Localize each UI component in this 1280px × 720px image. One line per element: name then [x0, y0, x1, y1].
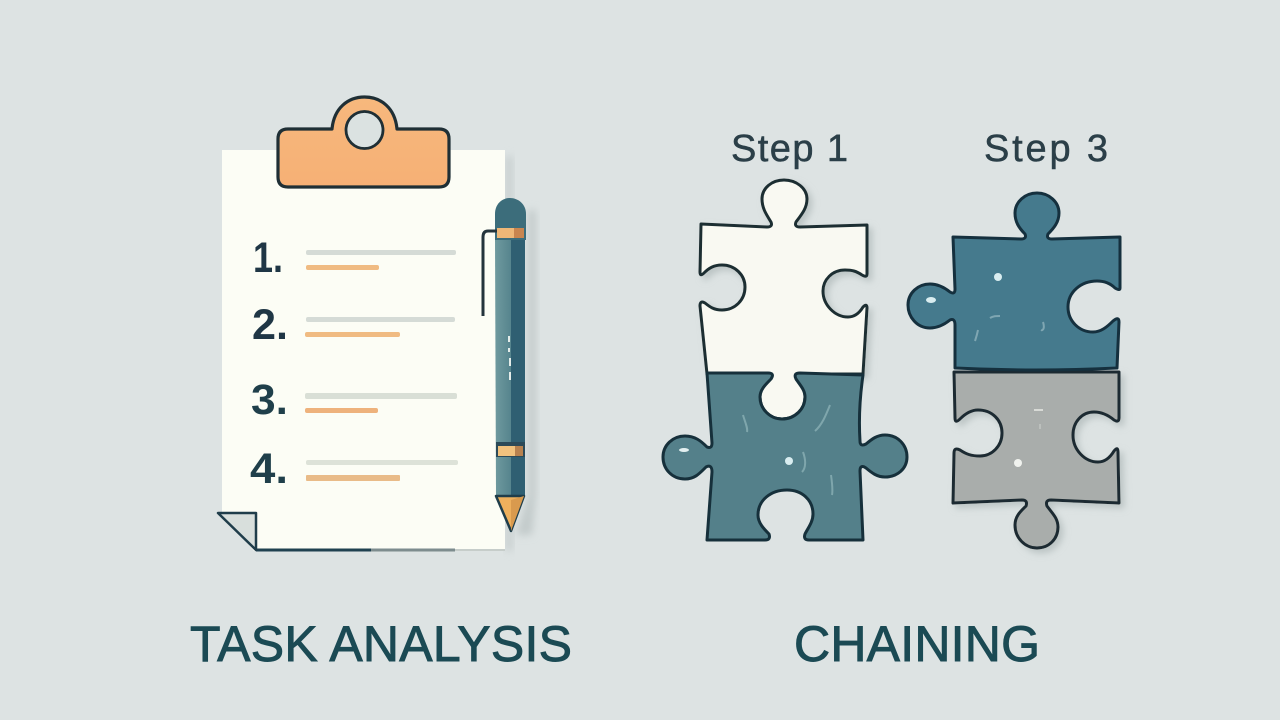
panel: task analysis clipboard	[218, 97, 536, 551]
list item 3: 3.	[251, 376, 288, 424]
list item 1: 1.	[253, 234, 283, 282]
list item 4	[250, 445, 458, 493]
list item 3	[251, 376, 457, 424]
puzzle piece: step 3 teal	[908, 193, 1120, 370]
icon: folded paper corner	[218, 513, 256, 550]
list item 2: 2.	[252, 301, 288, 349]
label: Step 1: Step 1	[731, 128, 848, 170]
label: Step 3: Step 3	[984, 128, 1108, 170]
heading: chaining: CHAINING	[794, 616, 1040, 672]
puzzle piece: step 1 teal	[663, 373, 907, 540]
puzzle piece: step 3 gray	[953, 372, 1119, 548]
list item 4: 4.	[250, 445, 288, 493]
list item 1	[253, 234, 456, 282]
panel: chaining puzzle pieces	[663, 128, 1120, 548]
icon: pen	[483, 198, 536, 535]
puzzle piece: step 1 cream	[700, 180, 867, 419]
icon: orange clip	[278, 97, 449, 187]
heading: task analysis: TASK ANALYSIS	[190, 616, 572, 672]
list item 2	[252, 301, 455, 349]
paper sheet	[222, 150, 513, 551]
